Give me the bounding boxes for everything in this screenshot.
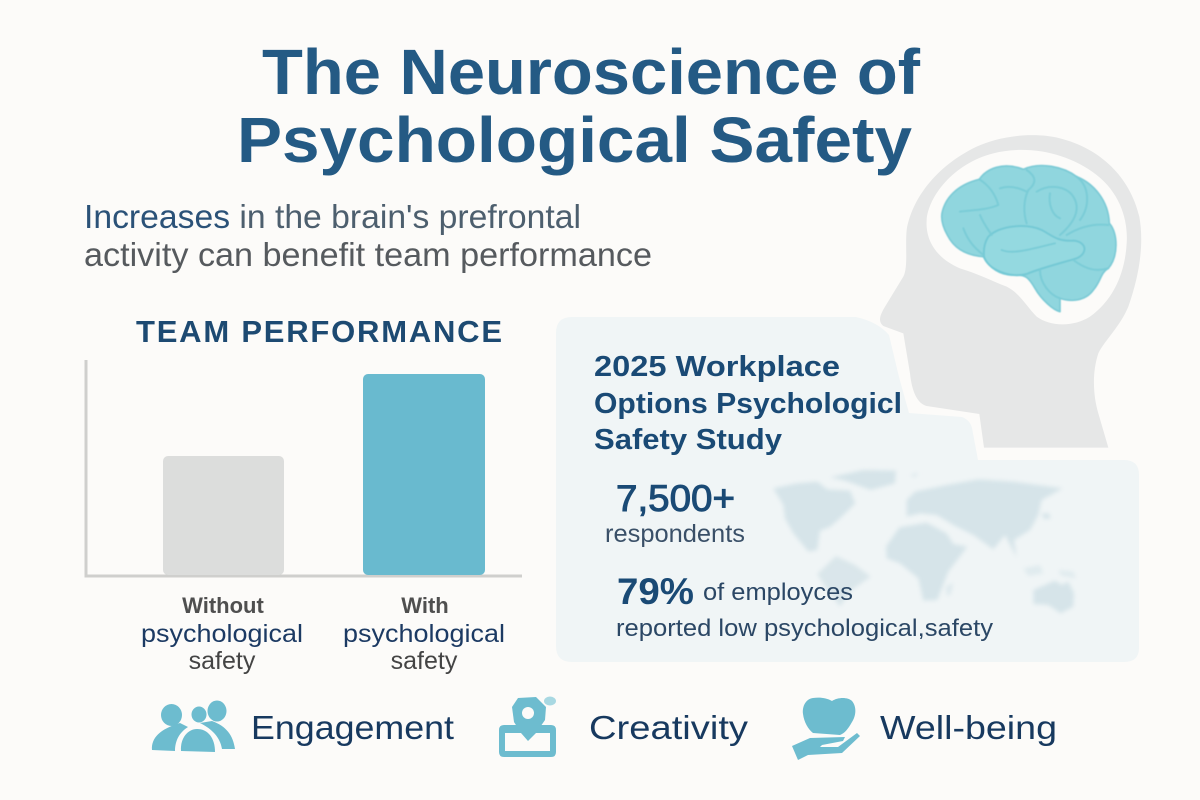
title: The Neuroscience of [262,36,921,108]
chart heading: TEAM PERFORMANCE [136,314,502,349]
title: Psychological Safety [237,104,912,176]
stat: respondents [605,478,745,548]
stat: 79% of employees: of employces [703,579,853,606]
head silhouette [880,135,1141,448]
bar: with psychological safety [363,374,485,575]
panel text: study title: Options Psychologicl [594,388,902,420]
label: engagement: Engagement [251,709,454,746]
subtitle: activity can benefit team performance [84,236,652,273]
world map [773,470,1076,613]
icon: people [152,700,235,752]
subtitle: Increases in the brain's prefrontal [84,198,581,235]
label: with psychological safety: With [401,593,449,618]
label: without psychological safety [141,593,303,675]
label: with psychological safety: safety [391,647,458,675]
panel: study background [556,317,1139,662]
chart axes [86,360,522,576]
subtitle [84,198,652,273]
bar: without psychological safety [163,456,284,575]
panel text: study title [594,351,902,456]
label: without psychological safety: psychological [141,620,303,648]
panel text: study title: 2025 Workplace [594,351,840,383]
stat: 79% of employees: reported low psychological,safety [616,615,993,642]
stat: respondents: respondents [605,520,745,548]
item: well-being [792,698,1057,760]
head inner halo [927,150,1127,324]
label: creativity: Creativity [589,709,749,746]
panel text: study title: Safety Study [594,424,782,456]
icon: pin on board [499,696,556,757]
icon: heart in hand [792,698,860,760]
icon: head silhouette with brain [880,135,1141,448]
title [237,36,921,176]
item: engagement [152,700,454,752]
label: with psychological safety [343,593,505,675]
stat: 79% of employees [616,571,993,642]
label: well-being: Well-being [880,709,1057,746]
label: without psychological safety: Without [182,593,264,618]
stat: 79% of employees: 79% [617,571,694,612]
bar chart: team performance [86,314,522,675]
brain [942,166,1116,312]
item: creativity [499,696,749,757]
label: with psychological safety: psychological [343,620,505,648]
label: without psychological safety: safety [189,647,256,675]
stat: respondents: 7,500+ [616,478,735,519]
